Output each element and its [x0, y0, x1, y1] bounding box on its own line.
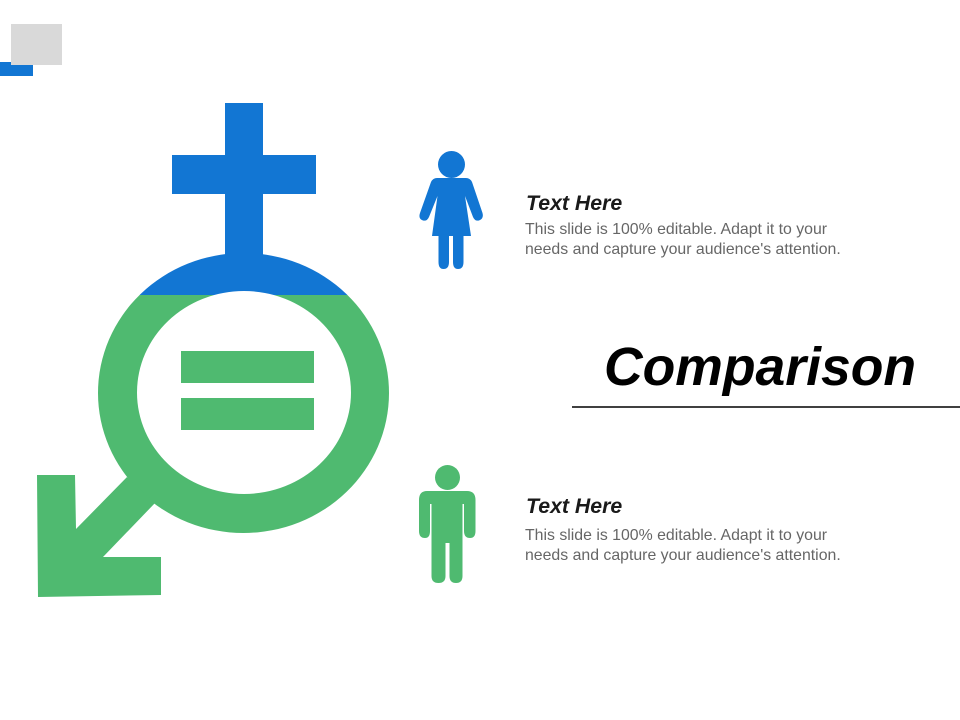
- blue cross and ring top: [140, 103, 348, 295]
- text block: second item: [525, 527, 841, 564]
- corner accent: grey square: [11, 24, 62, 65]
- green ring and arrow: [37, 295, 389, 597]
- text block: first item: This slide is 100% editable. Adapt it to your: [525, 221, 827, 238]
- icon: female figure: [419, 151, 483, 269]
- text block: second item: needs and capture your audience's attention.: [525, 547, 841, 564]
- title underline: [572, 406, 960, 408]
- gender equality symbol: [37, 103, 389, 597]
- text block: second item: This slide is 100% editable. Adapt it to your: [525, 527, 827, 544]
- title: Comparison: [604, 338, 916, 397]
- heading: second item: Text Here: [526, 494, 622, 518]
- heading: first item: Text Here: [526, 191, 622, 215]
- text block: first item: needs and capture your audience's attention.: [525, 241, 841, 258]
- corner accent: blue bar: [0, 62, 33, 76]
- text block: first item: [525, 221, 841, 258]
- equals sign: [181, 351, 314, 430]
- icon: male figure: [419, 465, 476, 583]
